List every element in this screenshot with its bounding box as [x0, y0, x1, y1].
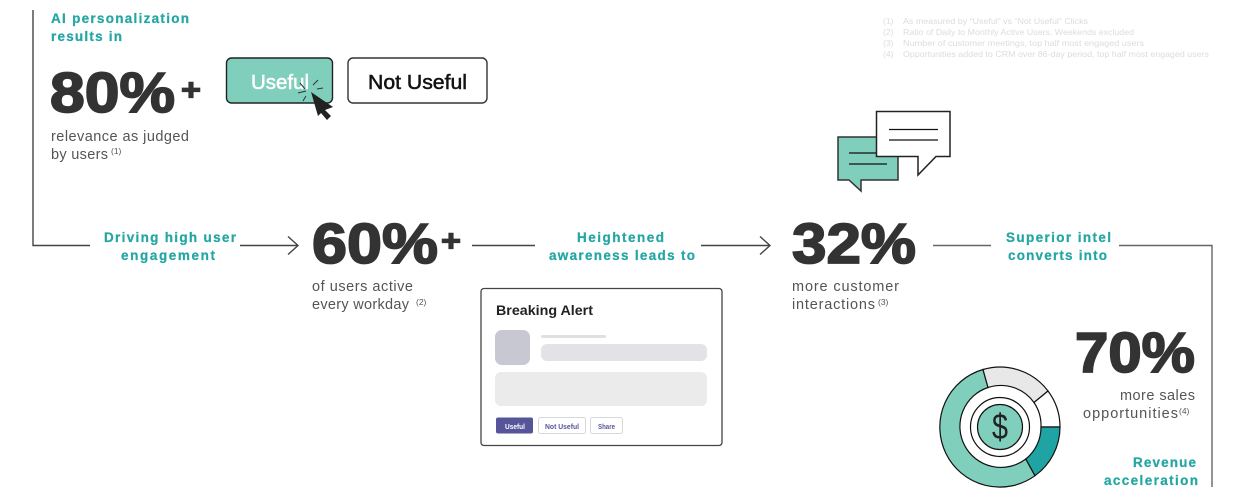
footnotes: (3) [883, 38, 894, 48]
footnotes: (1) [883, 16, 894, 26]
heading: AI personalization: AI personalization [51, 11, 189, 26]
heading: AI personalization [51, 11, 189, 44]
segment: white [1034, 391, 1060, 427]
card button: Useful: Useful [505, 422, 525, 431]
icon: click rays [298, 80, 323, 101]
text: of users active every workday: every workday [312, 297, 410, 313]
footnotes: Opportunities added to CRM over 86-day period, top half most engaged users [903, 49, 1209, 59]
segment: dark teal [1026, 427, 1060, 476]
text: relevance as judged by users: relevance as judged [51, 129, 189, 145]
text: of users active every workday [312, 279, 427, 313]
footnotes: Number of customer meetings, top half most engaged users [903, 38, 1144, 48]
footnotes: Ratio of Daily to Monthly Active Users, Weekends excluded [903, 27, 1134, 37]
text: of users active every workday: of users active [312, 279, 413, 295]
text: more customer interactions: interactions [792, 297, 875, 313]
button: Useful with cursor: Useful [251, 72, 309, 94]
label: Driving high user engagement: engagement [121, 248, 216, 263]
stat: 80%+: 80% [50, 61, 175, 125]
heading: AI personalization: results in [51, 29, 122, 44]
label: Revenue acceleration: Revenue [1133, 455, 1196, 470]
text: relevance as judged by users [51, 129, 189, 163]
text: more customer interactions: (3) [878, 297, 889, 307]
label: Superior intel converts into: converts into [1008, 248, 1107, 263]
card button: Share: Share [598, 422, 615, 431]
arrow: to 32% [701, 236, 770, 254]
flow line: left connector [33, 10, 90, 246]
text: of users active every workday: (2) [416, 297, 427, 307]
footnotes: (4) [883, 49, 894, 59]
text placeholders [495, 335, 707, 406]
arrow: to 60% [240, 236, 298, 254]
text: more sales opportunities: opportunities [1083, 406, 1178, 422]
label: Heightened awareness leads to: awareness leads to [549, 248, 695, 263]
text: more sales opportunities [1083, 388, 1195, 422]
text: more sales opportunities: more sales [1120, 388, 1195, 404]
footnotes: As measured by “Useful” vs “Not Useful” Clicks [903, 16, 1088, 26]
footnotes [883, 16, 1209, 59]
card button: Useful [496, 418, 533, 434]
icon: dollar sign: $ [992, 406, 1008, 447]
avatar placeholder [495, 330, 530, 365]
stat: 80%+: + [181, 74, 201, 107]
label: Superior intel converts into [1006, 230, 1111, 263]
panel: Breaking Alert card [481, 288, 722, 446]
stat: 70%: 70% [1075, 321, 1195, 385]
label: Driving high user engagement [104, 230, 237, 263]
button: Not Useful [348, 58, 487, 103]
label: Driving high user engagement: Driving high user [104, 230, 237, 245]
card button: Share [590, 418, 622, 434]
icon: cursor [311, 92, 333, 120]
stat: 32%: 32% [792, 212, 916, 276]
segment: light grey [983, 367, 1048, 402]
stat: 60%+: + [441, 225, 461, 258]
label: Revenue acceleration [1104, 455, 1198, 488]
footnotes: (2) [883, 27, 894, 37]
flow line: right connector [1119, 246, 1212, 487]
panel: Breaking Alert card: Breaking Alert [496, 302, 593, 318]
text: more customer interactions: more customer [792, 279, 899, 295]
text: more customer interactions [792, 279, 899, 313]
label: Heightened awareness leads to: Heightened [577, 230, 664, 245]
icon: chat bubbles [838, 112, 950, 191]
text: more sales opportunities: (4) [1179, 406, 1190, 416]
label: Heightened awareness leads to [549, 230, 695, 263]
donut chart with dollar icon [940, 367, 1060, 487]
connector: 60% to Heightened [472, 244, 535, 246]
stat: 60%+: 60% [312, 212, 438, 276]
text: relevance as judged by users: (1) [111, 146, 122, 156]
card button: Not Useful [538, 418, 586, 434]
label: Revenue acceleration: acceleration [1104, 473, 1198, 488]
card button: Not Useful: Not Useful [545, 422, 579, 431]
connector: 32% to Superior [933, 244, 991, 246]
label: Superior intel converts into: Superior intel [1006, 230, 1111, 245]
button: Not Useful: Not Useful [368, 72, 467, 94]
button: Useful with cursor [226, 58, 333, 120]
segment: large teal [940, 370, 1035, 487]
text: relevance as judged by users: by users [51, 147, 108, 163]
